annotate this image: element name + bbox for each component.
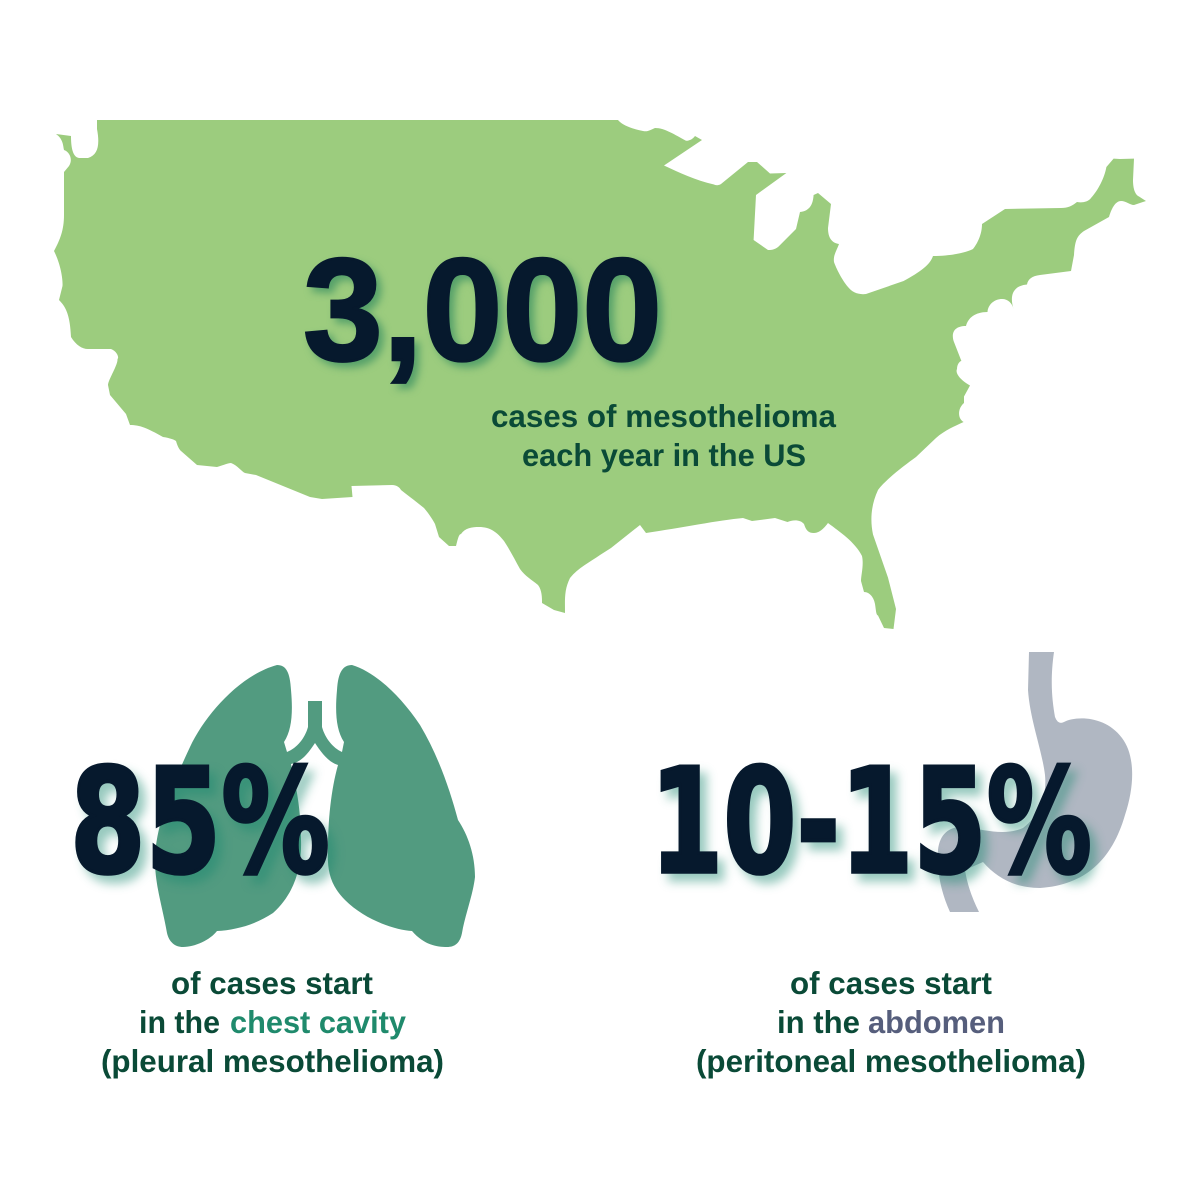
caption: abdomen: in the xyxy=(777,1004,860,1040)
caption: cases per year xyxy=(491,398,836,473)
caption: cases per year: each year in the US xyxy=(522,437,806,473)
caption: abdomen: of cases start xyxy=(790,965,993,1001)
caption: chest cavity: in the xyxy=(139,1004,220,1040)
caption: abdomen: (peritoneal mesothelioma) xyxy=(696,1043,1086,1079)
caption: chest cavity: of cases start xyxy=(171,965,374,1001)
statistic: 3,000: 3,000 xyxy=(303,228,662,391)
caption: abdomen: abdomen xyxy=(868,1004,1005,1040)
icon: lungs xyxy=(155,665,475,947)
icon: stomach xyxy=(938,652,1132,912)
caption: chest cavity xyxy=(101,965,444,1079)
map: contiguous United States xyxy=(54,120,1146,629)
caption: cases per year: cases of mesothelioma xyxy=(491,398,836,434)
caption: chest cavity: chest cavity xyxy=(230,1004,406,1040)
statistic: 85%: 85% xyxy=(70,738,330,907)
caption: abdomen xyxy=(696,965,1086,1079)
caption: chest cavity: (pleural mesothelioma) xyxy=(101,1043,444,1079)
